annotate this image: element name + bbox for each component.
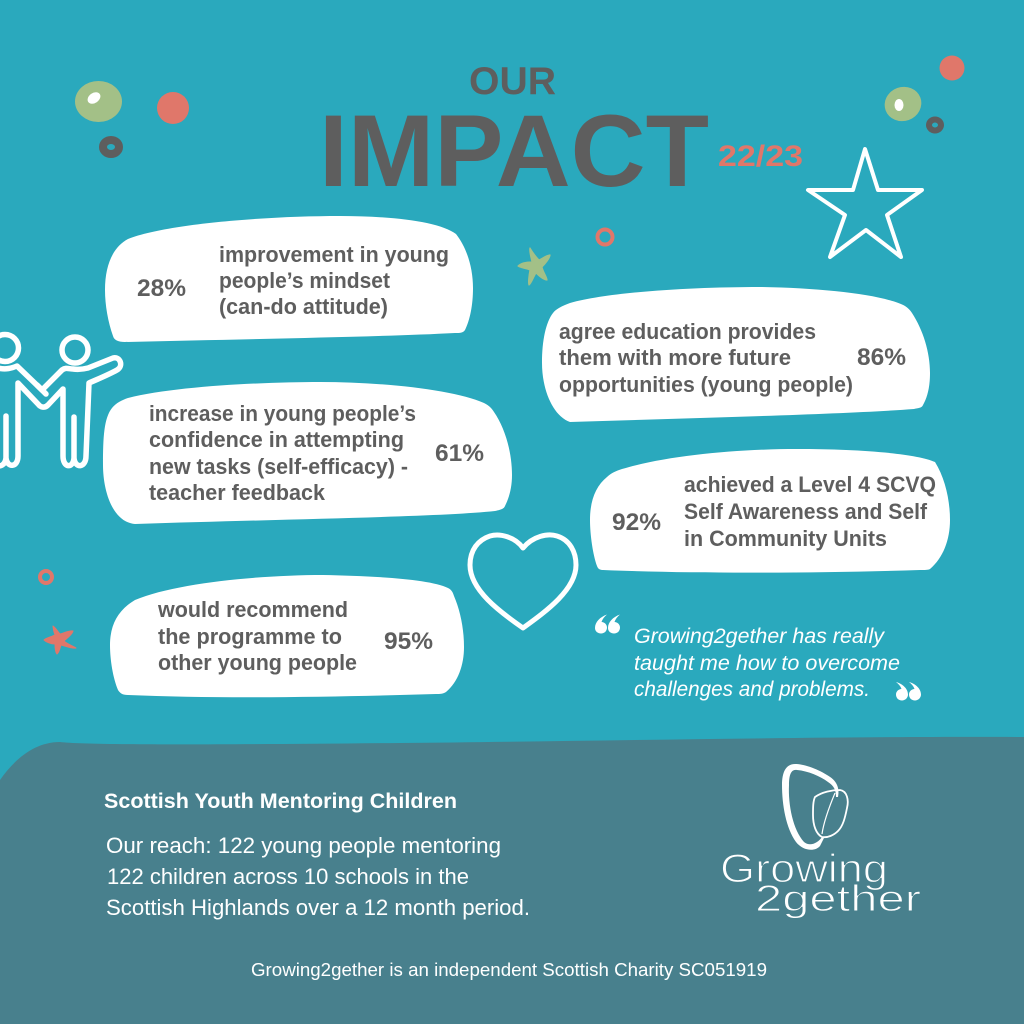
year label: 22/23 <box>718 140 803 173</box>
panel: recommend stat: 95% <box>384 628 433 655</box>
panel: self-efficacy stat <box>103 382 512 524</box>
panel: agree education stat: 86% <box>857 344 906 371</box>
text block: our reach: 122 children across 10 schools in the <box>107 864 469 889</box>
panel: agree education stat <box>542 287 930 422</box>
panel: mindset stat: (can-do attitude) <box>219 294 388 319</box>
title: OUR <box>469 60 556 103</box>
panel: agree education stat: opportunities (young people) <box>559 372 853 397</box>
quote text: Growing2gether has really <box>634 625 886 648</box>
panel: agree education stat: them with more future <box>559 345 791 370</box>
text block: our reach: Scottish Highlands over a 12 month period. <box>106 895 530 920</box>
decorative coral ring <box>598 230 612 244</box>
panel: mindset stat: people’s mindset <box>219 268 391 293</box>
logo: Growing2gether <box>720 764 921 919</box>
footer note: Growing2gether is an independent Scottish Charity SC051919 <box>251 960 767 980</box>
title: IMPACT <box>319 94 709 208</box>
decorative dots top left <box>75 81 189 154</box>
panel: SCVQ stat <box>590 449 950 573</box>
heading: Scottish Youth Mentoring Children: Scottish Youth Mentoring Children <box>104 790 457 813</box>
panel: recommend stat: would recommend <box>157 597 348 622</box>
panel: mindset stat: improvement in young <box>219 242 449 267</box>
panel: self-efficacy stat: teacher feedback <box>149 480 326 505</box>
panel: mindset stat: 28% <box>137 275 186 302</box>
icon: two people holding hands <box>0 334 121 466</box>
icon: heart outline <box>470 535 576 628</box>
icon: star outline <box>808 149 922 257</box>
panel: SCVQ stat: 92% <box>612 509 661 536</box>
quote text: challenges and problems. <box>634 678 870 701</box>
panel: agree education stat: agree education provides <box>559 319 816 344</box>
decorative green starfish <box>518 248 550 285</box>
logo: Growing2gether: 2gether <box>755 878 921 919</box>
panel: SCVQ stat: achieved a Level 4 SCVQ <box>684 472 936 497</box>
decorative dots top right <box>880 56 964 130</box>
quote text: taught me how to overcome <box>634 652 900 675</box>
panel: SCVQ stat: in Community Units <box>684 526 887 551</box>
panel: self-efficacy stat: new tasks (self-efficacy) - <box>149 454 408 479</box>
panel: mindset stat <box>105 216 473 342</box>
logo: Growing2gether: Growing <box>720 847 888 891</box>
panel: self-efficacy stat: confidence in attempting <box>149 427 404 452</box>
decorative coral ring left <box>40 571 52 583</box>
bottom band <box>0 737 1024 1024</box>
icon: closing quote mark <box>896 682 921 700</box>
text block: our reach <box>106 833 530 920</box>
panel: recommend stat: other young people <box>158 650 357 675</box>
panel: SCVQ stat: Self Awareness and Self <box>684 499 928 524</box>
panel: self-efficacy stat: increase in young people’s <box>149 401 416 426</box>
panel: recommend stat <box>110 575 464 697</box>
quote text <box>634 625 900 701</box>
text block: our reach: Our reach: 122 young people mentoring <box>106 833 501 858</box>
decorative coral starfish <box>44 626 76 654</box>
panel: recommend stat: the programme to <box>158 624 342 649</box>
panel: self-efficacy stat: 61% <box>435 440 484 467</box>
icon: opening quote mark <box>595 614 620 634</box>
